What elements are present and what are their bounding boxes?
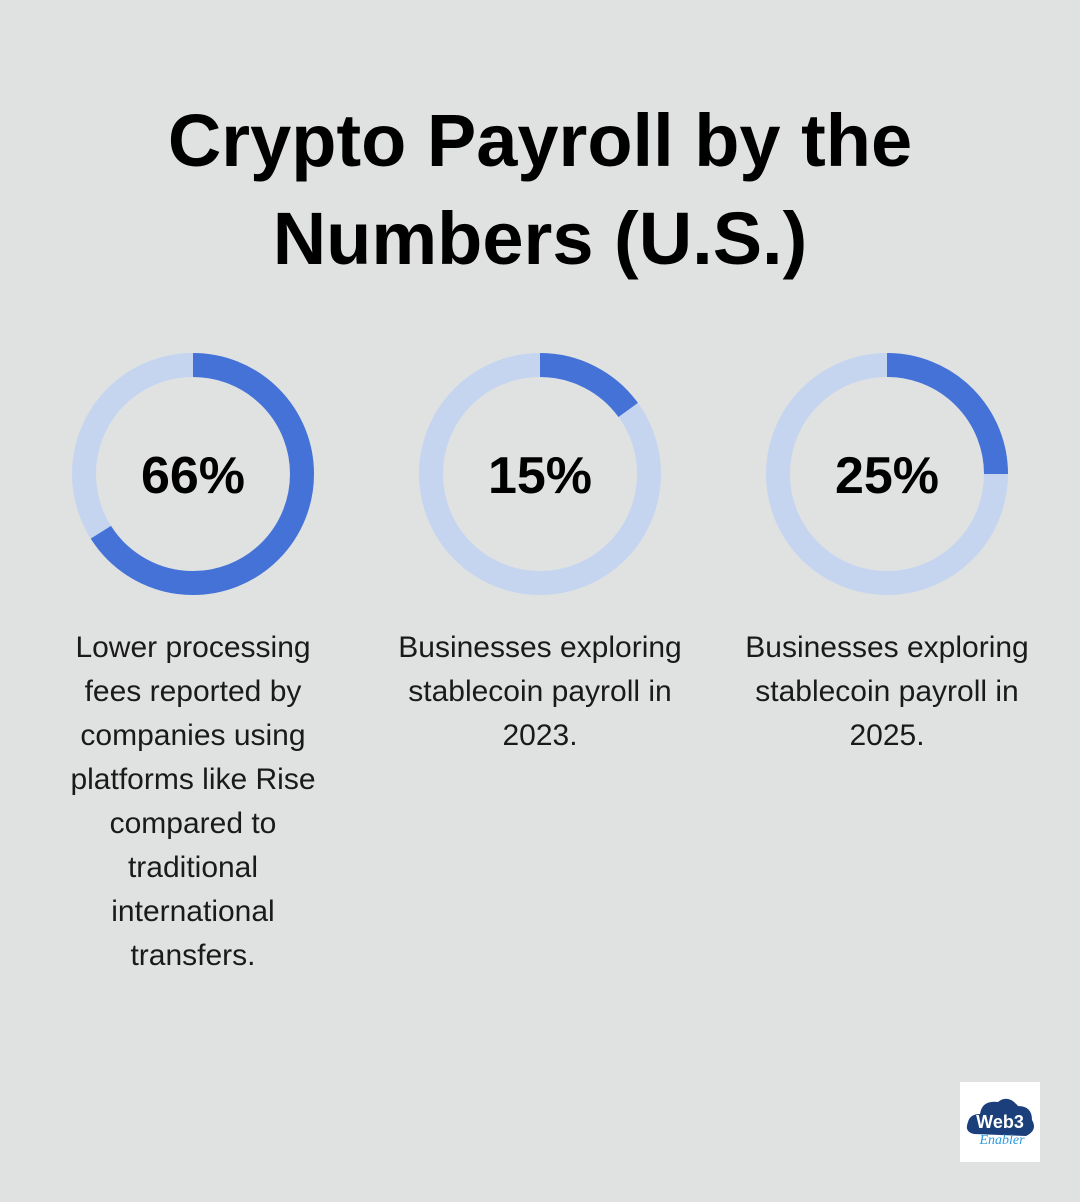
title <box>168 99 912 280</box>
text: 25% description: Businesses exploring stablecoin payroll in 2025. <box>745 631 1029 752</box>
logo <box>960 1082 1040 1162</box>
text: 66% description: Lower processing fees reported by companies using platforms like Rise compared to traditional international transfers. <box>70 631 316 972</box>
donut: 25%: 25% <box>835 447 939 505</box>
donut: 66% <box>72 353 314 595</box>
logo: Enabler <box>978 1133 1025 1148</box>
title: Crypto Payroll by the <box>168 99 912 182</box>
text: 15% description: Businesses exploring stablecoin payroll in 2023. <box>398 631 682 752</box>
logo: Web3 <box>976 1112 1024 1132</box>
title: Numbers (U.S.) <box>273 197 807 280</box>
donut: 15% <box>419 353 661 595</box>
donut: 66%: 66% <box>141 447 245 505</box>
donut: 25% <box>766 353 1008 595</box>
donut: 15%: 15% <box>488 447 592 505</box>
